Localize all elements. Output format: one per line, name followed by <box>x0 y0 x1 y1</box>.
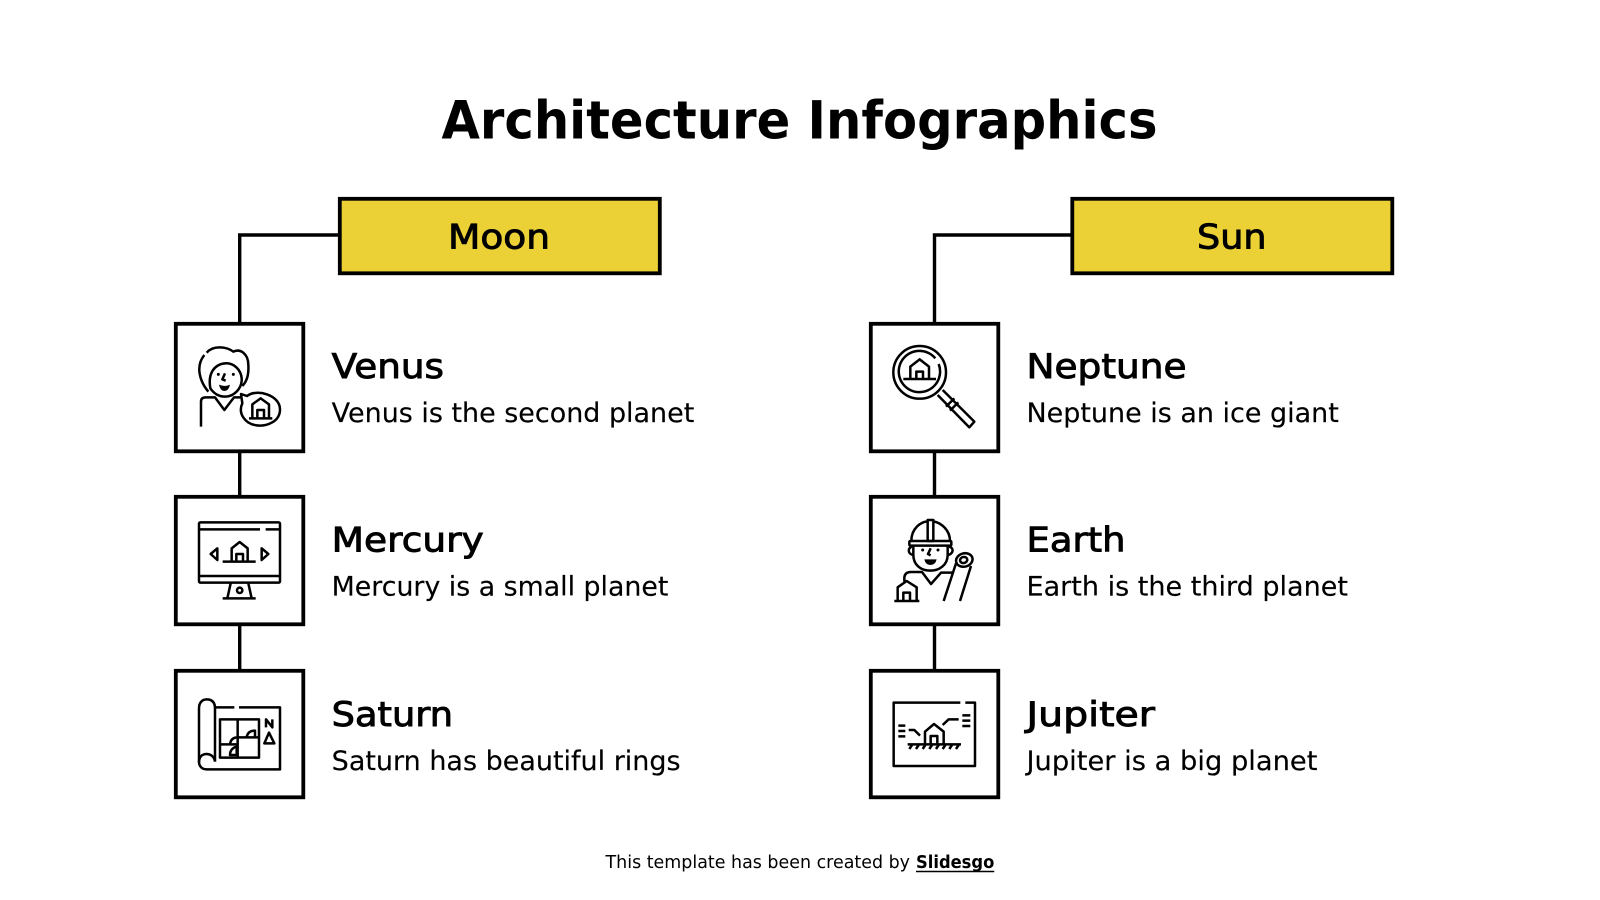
description: Mercury: Mercury is a small planet <box>332 572 668 602</box>
label: Saturn: Saturn <box>332 695 453 735</box>
item: Venus <box>176 324 694 451</box>
description: Saturn: Saturn has beautiful rings <box>332 746 681 777</box>
description: Venus: Venus is the second planet <box>332 398 694 429</box>
header: Moon <box>340 199 660 273</box>
item: Mercury <box>176 497 668 624</box>
label: Mercury: Mercury <box>332 520 484 560</box>
label: Venus: Venus <box>332 347 444 387</box>
description: Neptune: Neptune is an ice giant <box>1026 398 1339 429</box>
panel: Moon column <box>176 199 694 797</box>
header: Sun: Sun <box>1197 218 1266 258</box>
header: Moon: Moon <box>448 218 550 258</box>
title: Architecture Infographics <box>442 90 1158 152</box>
icon: site plan with house <box>894 703 975 766</box>
icon: monitor with house <box>199 522 280 598</box>
panel: Sun column <box>871 199 1392 797</box>
connector lines: Moon <box>240 235 340 671</box>
footer credit: This template has been created by <box>605 852 910 873</box>
description: Earth: Earth is the third planet <box>1026 572 1348 602</box>
header: Sun <box>1072 199 1392 273</box>
item: Saturn <box>176 671 681 797</box>
icon: blueprint scroll <box>199 699 280 769</box>
footer credit: Slidesgo <box>916 852 994 873</box>
item: Earth <box>871 497 1348 624</box>
item: Neptune <box>871 324 1339 451</box>
icon: magnifier over house <box>893 346 974 427</box>
icon: architect with helmet <box>894 520 974 601</box>
icon: woman with house bubble <box>199 347 280 427</box>
label: Neptune: Neptune <box>1026 347 1186 387</box>
connector lines: Sun <box>934 235 1072 671</box>
description: Jupiter: Jupiter is a big planet <box>1024 746 1317 777</box>
item: Jupiter <box>871 671 1317 797</box>
label: Jupiter: Jupiter <box>1024 695 1155 735</box>
label: Earth: Earth <box>1026 520 1126 560</box>
